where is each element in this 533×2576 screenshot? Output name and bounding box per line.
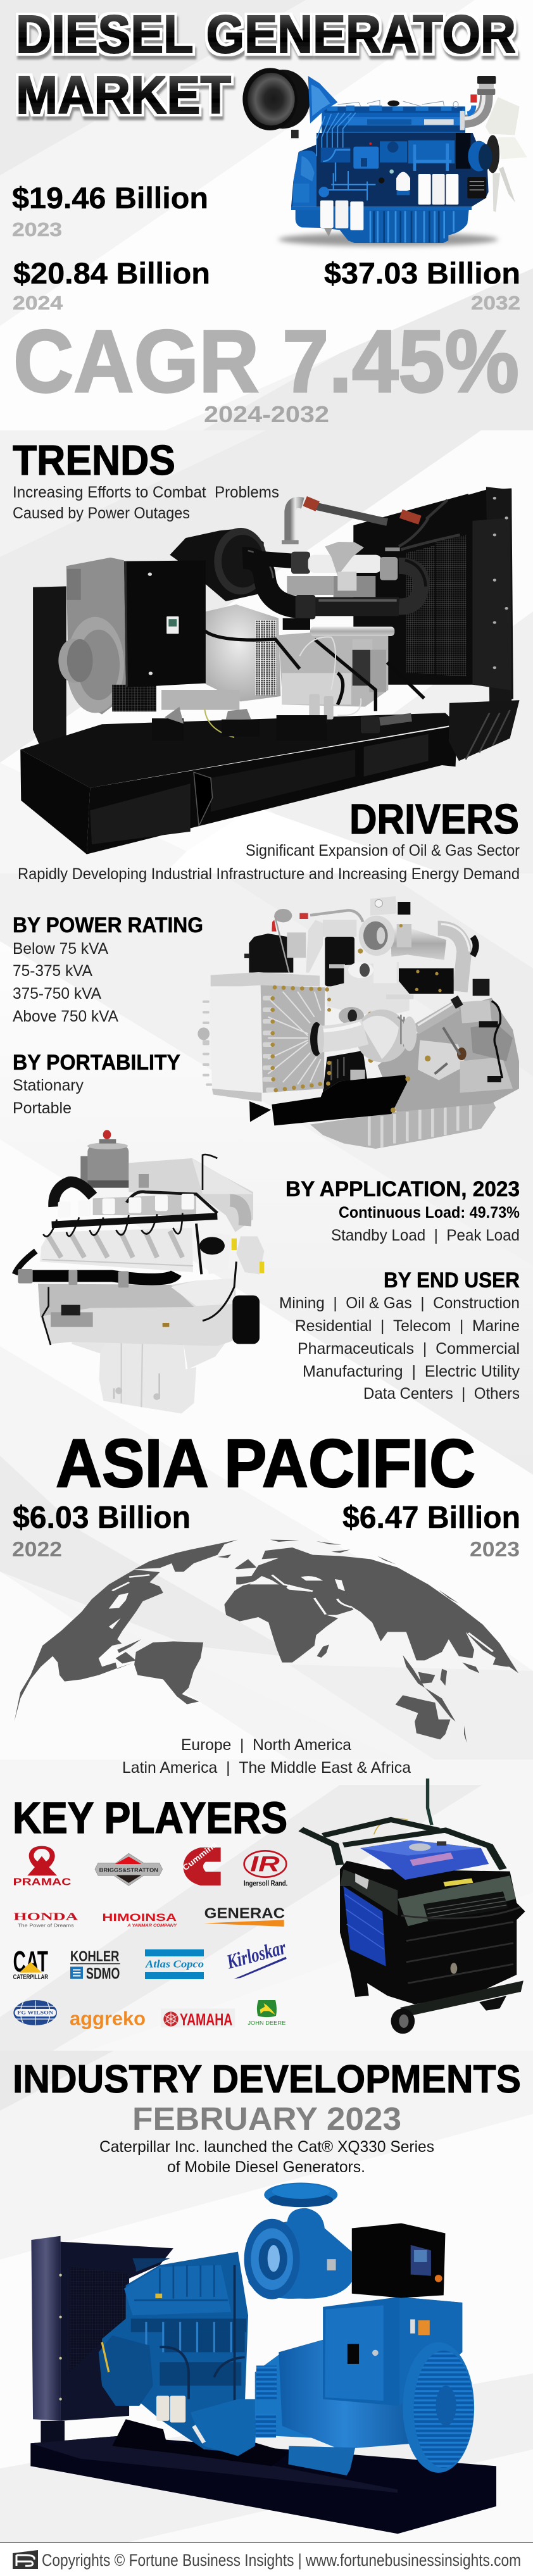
- by end user: Residential | Telecom | Marine: [295, 1317, 520, 1335]
- icon: black and white generator set: [20, 487, 520, 854]
- icon: blue engine: [242, 68, 527, 246]
- logo: John Deere: JOHN DEERE: [248, 2020, 286, 2026]
- market value 2023: 2023: [12, 218, 62, 241]
- logo: Kirloskar: Kirloskar: [223, 1935, 289, 1973]
- logo: Kirloskar: [223, 1935, 289, 1979]
- generator engine detail: [152, 494, 468, 741]
- asia pacific 2022 value: [12, 1501, 191, 1561]
- other regions: Latin America | The Middle East & Africa: [122, 1759, 411, 1777]
- logo: Himoinsa: A YANMAR COMPANY: [127, 1923, 177, 1928]
- by power rating: 75-375 kVA: [13, 962, 92, 980]
- title: [16, 4, 516, 125]
- logo: Pramac: PRAMAC: [13, 1877, 71, 1888]
- development description: Caterpillar Inc. launched the Cat® XQ330 Series: [99, 2138, 434, 2156]
- asia pacific heading: ASIA PACIFIC: [56, 1425, 475, 1501]
- logo: Cummins: [181, 1840, 221, 1885]
- by power rating: Below 75 kVA: [13, 940, 108, 958]
- development date: FEBRUARY 2023: [132, 2101, 401, 2137]
- logo: Yamaha: YAMAHA: [180, 2010, 232, 2029]
- CAGR: 2024-2032: [204, 401, 329, 427]
- by application: Standby Load | Peak Load: [331, 1227, 520, 1244]
- market value 2023: [12, 181, 208, 241]
- logo: Kohler SDMO: [70, 1948, 120, 1982]
- title: MARKET: [16, 65, 231, 125]
- by portability: Stationary: [13, 1077, 84, 1094]
- key player logos: [13, 1840, 289, 2029]
- drivers: Rapidly Developing Industrial Infrastructure and Increasing Energy Demand: [18, 865, 520, 883]
- market value 2024: [13, 256, 210, 314]
- logo: FG Wilson: FG WILSON: [17, 2010, 53, 2016]
- by portability: Portable: [13, 1099, 72, 1117]
- industry developments heading: INDUSTRY DEVELOPMENTS: [13, 2058, 521, 2101]
- logo: John Deere: [248, 2000, 286, 2026]
- logo: Honda: The Power of Dreams: [18, 1922, 74, 1928]
- other regions: Europe | North America: [181, 1736, 351, 1754]
- key players heading: KEY PLAYERS: [13, 1793, 287, 1842]
- logo: Ingersoll Rand: IR: [250, 1853, 280, 1877]
- logo: Atlas Copco: Atlas Copco: [145, 1958, 204, 1970]
- asia pacific 2022 value: 2022: [12, 1537, 62, 1561]
- generator control box: [124, 560, 206, 687]
- by power rating: Above 750 kVA: [13, 1008, 118, 1025]
- by power rating: 375-750 kVA: [13, 985, 101, 1003]
- by end user: Manufacturing | Electric Utility: [303, 1363, 520, 1380]
- trends: TRENDS: [13, 437, 175, 484]
- by end user: Data Centers | Others: [363, 1385, 520, 1403]
- logo: Atlas Copco: [145, 1949, 204, 1979]
- icon: portable generator: [301, 1779, 525, 2034]
- trends: Increasing Efforts to Combat Problems: [13, 484, 279, 501]
- asia pacific 2023 value: [342, 1501, 520, 1561]
- logo: Kohler SDMO: SDMO: [86, 1965, 120, 1982]
- by application: Continuous Load: 49.73%: [339, 1204, 520, 1222]
- logo: Himoinsa: HIMOINSA: [102, 1911, 177, 1923]
- by end user: Pharmaceuticals | Commercial: [298, 1340, 520, 1358]
- by application: BY APPLICATION, 2023: [285, 1177, 520, 1201]
- market value 2032: 2032: [471, 292, 520, 314]
- logo: Kohler SDMO: KOHLER: [70, 1948, 119, 1965]
- logo: Cummins: Cummins: [181, 1840, 219, 1872]
- logo: Generac: GENERAC: [204, 1905, 285, 1922]
- by portability: [13, 1051, 180, 1117]
- market value 2032: [324, 256, 520, 314]
- market value 2024: $20.84 Billion: [13, 256, 210, 290]
- logo: Ingersoll Rand: Ingersoll Rand.: [244, 1879, 287, 1887]
- logo: Honda: [13, 1910, 78, 1928]
- icon: blue generator set: [30, 2183, 496, 2534]
- by portability: BY PORTABILITY: [13, 1051, 180, 1075]
- asia pacific 2023 value: $6.47 Billion: [342, 1501, 520, 1535]
- icon: V engine: [15, 1130, 264, 1413]
- logo: Caterpillar: [13, 1945, 48, 1981]
- footer logo: [13, 2550, 38, 2569]
- logo: Yamaha: [161, 2008, 235, 2029]
- market value 2024: 2024: [13, 292, 63, 314]
- asia pacific 2022 value: $6.03 Billion: [13, 1501, 191, 1535]
- logo: Ingersoll Rand: [244, 1851, 287, 1887]
- logo: Aggreko: aggreko: [70, 2008, 146, 2029]
- by end user: BY END USER: [384, 1268, 520, 1292]
- logo: Caterpillar: CAT: [13, 1945, 48, 1978]
- drivers: DRIVERS: [349, 796, 519, 843]
- logo: Pramac: [13, 1846, 71, 1888]
- by power rating: BY POWER RATING: [13, 913, 203, 937]
- by end user: Mining | Oil & Gas | Construction: [279, 1294, 520, 1312]
- trends: [13, 437, 279, 522]
- logo: Briggs and Stratton: [95, 1853, 163, 1885]
- by end user: [279, 1268, 520, 1403]
- development description: [99, 2138, 434, 2176]
- trends: Caused by Power Outages: [13, 504, 190, 522]
- logo: Generac: [204, 1905, 285, 1927]
- other regions: [122, 1736, 411, 1777]
- asia pacific 2023 value: 2023: [470, 1537, 520, 1561]
- market value 2023: $19.46 Billion: [12, 181, 208, 215]
- logo: Caterpillar: CATERPILLAR: [13, 1973, 48, 1981]
- market value 2032: $37.03 Billion: [324, 256, 520, 290]
- development description: of Mobile Diesel Generators.: [167, 2158, 365, 2176]
- logo: FG Wilson: [13, 2000, 57, 2025]
- footer divider: [0, 2542, 533, 2543]
- logo: Honda: HONDA: [13, 1910, 78, 1922]
- drivers: [18, 796, 520, 883]
- by application: [285, 1177, 520, 1244]
- logo: Briggs and Stratton: BRIGGS&STRATTON: [99, 1866, 158, 1873]
- world map globe: [15, 1540, 518, 1742]
- by power rating: [13, 913, 203, 1025]
- logo: Himoinsa: [102, 1911, 177, 1928]
- icon: silver engine with cooler: [198, 896, 519, 1149]
- drivers: Significant Expansion of Oil & Gas Sector: [246, 842, 520, 860]
